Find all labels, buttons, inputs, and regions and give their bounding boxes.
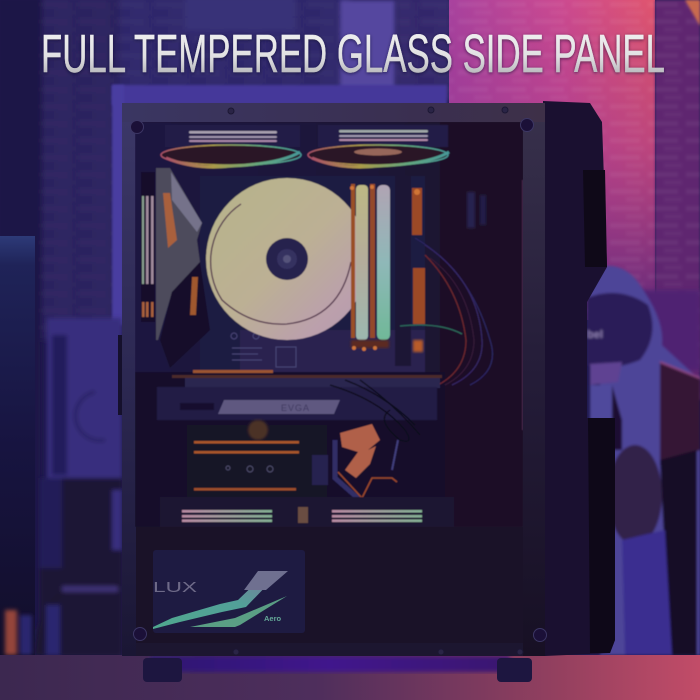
left white box on shelf (5, 318, 122, 656)
chair behind case (585, 266, 700, 655)
graphics card: EVGA (281, 403, 310, 413)
RAM sticks (350, 184, 390, 351)
computer case (122, 101, 615, 656)
left motherboard shroud (141, 168, 210, 368)
motherboard details (231, 333, 296, 367)
case side panel (543, 101, 615, 656)
right grommets (467, 192, 475, 228)
motherboard back (200, 176, 425, 337)
case feet and glow (143, 656, 532, 682)
bottom fans (160, 497, 454, 527)
PSU label: Aero (264, 614, 282, 623)
table top (0, 655, 700, 700)
cables over card (330, 380, 420, 441)
glass interior (135, 122, 523, 527)
top radiator fans (161, 125, 449, 167)
PSU label: LUX (153, 579, 197, 596)
PSU label (153, 550, 305, 633)
cable bundle (400, 238, 492, 385)
case front frame (122, 103, 545, 656)
big CPU cooler fan (206, 178, 368, 340)
lower board (187, 420, 328, 497)
corner screws (130, 118, 546, 642)
AORUS eagle logo (335, 424, 398, 500)
top and bottom rail screws (228, 107, 523, 655)
orange lit heatsink (412, 188, 425, 352)
graphics card (157, 370, 442, 420)
pink lit wall (449, 0, 655, 320)
chair behind case: bel (587, 329, 603, 341)
PSU shroud (136, 527, 523, 643)
left dark monitor (0, 236, 35, 656)
